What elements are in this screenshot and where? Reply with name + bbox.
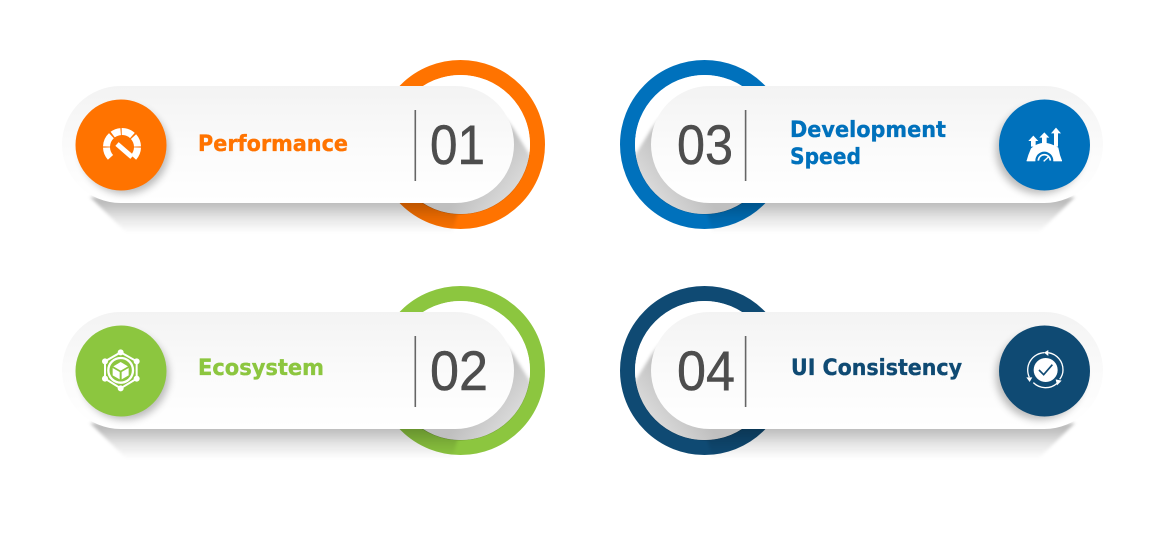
- icon: speed gauge: [106, 131, 138, 157]
- icon circle: blue: [996, 100, 1090, 194]
- icon circle: green: [76, 326, 169, 420]
- pill shadow: [90, 75, 533, 234]
- card 02: Ecosystem: [62, 294, 538, 460]
- divider: [745, 336, 746, 407]
- number 01: 01: [430, 113, 485, 176]
- icon: rising arrows over gauge: [1027, 128, 1062, 170]
- icon circle: navy: [996, 326, 1090, 420]
- pill shadow: [632, 301, 1075, 460]
- card 01: Performance: [62, 68, 538, 234]
- ring: blue: [628, 68, 782, 222]
- icon: check in cycle arrows: [1026, 350, 1063, 388]
- ring: green: [384, 294, 538, 448]
- icon: hexagon network cube: [102, 349, 140, 391]
- heading: Development Speed: [790, 118, 946, 170]
- pill: white card: [651, 312, 1103, 429]
- pill: white card: [651, 86, 1103, 203]
- card 04: UI Consistency: [628, 294, 1103, 460]
- heading: UI Consistency: UI Consistency: [791, 356, 962, 381]
- heading: Development Speed: Speed: [790, 145, 861, 170]
- heading: Ecosystem: Ecosystem: [198, 356, 324, 381]
- ring: orange: [384, 68, 538, 222]
- icon circle: orange: [76, 100, 169, 194]
- divider: [414, 336, 416, 407]
- number 02: 02: [430, 339, 488, 402]
- heading: Performance: Performance: [198, 132, 348, 157]
- pill shadow: [90, 301, 533, 460]
- pill shadow: [632, 75, 1075, 234]
- divider: [414, 110, 416, 181]
- pill: white card: [62, 312, 514, 429]
- card 03: Development Speed: [628, 68, 1103, 234]
- ring: navy: [628, 294, 782, 448]
- pill: white card: [62, 86, 514, 203]
- number 04: 04: [677, 339, 735, 402]
- divider: [745, 110, 746, 181]
- number 03: 03: [677, 113, 733, 176]
- heading: Development Speed: Development: [790, 118, 946, 143]
